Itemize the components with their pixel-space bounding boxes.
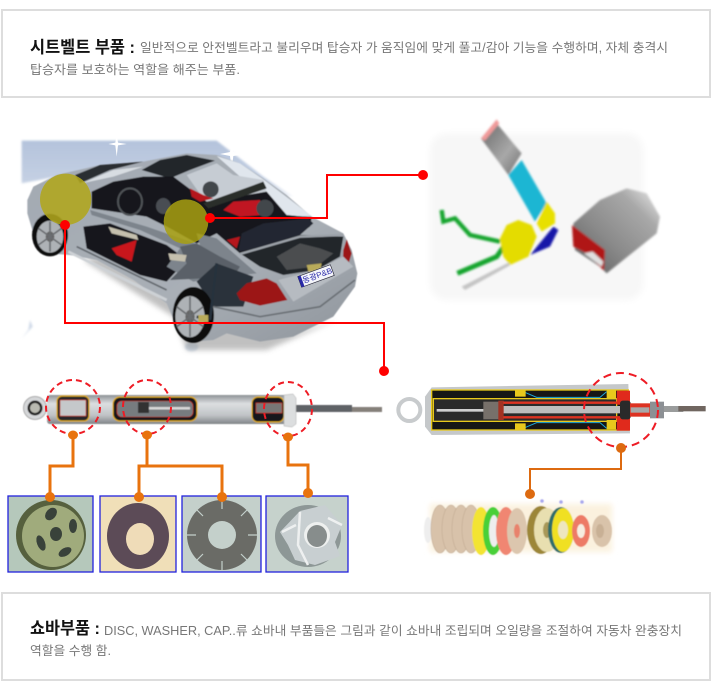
salmon ring	[572, 515, 590, 547]
orange connector right	[525, 443, 626, 499]
window 2	[113, 397, 197, 421]
red sleeve	[630, 403, 650, 417]
headrests	[203, 181, 219, 197]
highlight: rear seat belt area	[164, 199, 208, 244]
yellow seals	[515, 390, 526, 397]
hood dark detail	[75, 162, 143, 183]
text block: shock absorber description line 2: 역할을 수행 함.	[30, 643, 111, 658]
panel: shock absorber description	[2, 593, 710, 680]
rod end	[663, 406, 683, 412]
dashed red circles left	[46, 380, 312, 436]
grey strap tail	[462, 263, 510, 290]
blue base	[530, 227, 558, 255]
teal yellow disc	[548, 507, 574, 553]
roof opening	[142, 155, 215, 178]
small parts	[108, 227, 138, 240]
trunk lip	[240, 235, 343, 254]
heading: seat belt parts: 시트벨트 부품 :	[30, 38, 135, 57]
car body	[27, 153, 357, 342]
exploded valve parts	[424, 499, 612, 555]
inner rod	[437, 409, 485, 412]
strut	[197, 263, 217, 320]
rear tonneau	[238, 218, 313, 252]
yellow disc	[472, 507, 490, 555]
yellow buckle upper	[537, 202, 555, 232]
buckle cover	[573, 188, 660, 273]
trunk opening	[240, 235, 343, 275]
ground shadow	[83, 257, 337, 350]
photo: notched disc	[182, 496, 261, 572]
sky background	[22, 141, 293, 351]
rear suspension area	[197, 263, 253, 307]
rear wheel	[173, 287, 214, 343]
highlight: front seat belt area	[40, 174, 91, 225]
orange connectors left	[45, 430, 313, 502]
outer tube	[47, 395, 287, 424]
gold body	[527, 506, 555, 554]
cabin dark interior	[92, 177, 312, 253]
green disc	[483, 507, 503, 555]
lower door interior	[83, 223, 187, 282]
red valve lines	[503, 403, 620, 417]
outer casing	[425, 384, 630, 435]
tan disc	[507, 508, 527, 554]
heading: shock absorber parts: 쇼바부품 :	[30, 619, 100, 638]
piston	[483, 402, 503, 419]
steering wheel	[118, 188, 142, 215]
front wheel	[32, 214, 68, 256]
window 3	[252, 397, 284, 422]
dashed red circle right	[584, 373, 658, 447]
tan end disc	[592, 515, 612, 547]
text block: shock absorber description line 1: DISC, WASHER, CAP..류 쇼바내 부품들은 그림과 같이 쇼바내 조립되며 오일량을 조절하여 자동차 완충장치	[104, 624, 682, 638]
red cap blocks	[617, 391, 630, 405]
red seats	[190, 188, 213, 202]
sill highlight	[68, 252, 167, 300]
shock absorber left	[24, 394, 382, 427]
star flares	[108, 133, 127, 157]
inner black	[432, 390, 628, 430]
end cap	[284, 394, 296, 427]
tail light	[237, 278, 287, 306]
blue fluid lines	[523, 392, 607, 428]
translucent window band	[90, 210, 257, 282]
rear window light	[217, 156, 312, 217]
license plate: 동광P&B	[301, 265, 333, 285]
red connector: front highlight to shock absorber	[60, 220, 389, 376]
photo: metal cap	[266, 496, 348, 572]
yellow anchor	[500, 220, 537, 265]
piston rod	[292, 405, 352, 412]
soft background	[430, 133, 643, 300]
trunk lid	[278, 257, 353, 302]
green wires	[442, 210, 500, 242]
salmon disc	[496, 507, 516, 555]
bumper crease	[213, 280, 355, 317]
inner chamber	[433, 399, 617, 421]
red connector: rear highlight to belt illustration	[205, 170, 428, 223]
roll bar	[203, 182, 267, 208]
window 1	[57, 396, 89, 421]
soft glow background	[430, 504, 612, 552]
text block: seat belt description line 2: 탑승자를 보호하는 역할을 해주는 부품.	[30, 63, 240, 77]
car cutaway illustration	[22, 133, 357, 351]
photo: perforated disc	[8, 496, 93, 572]
violet drops	[540, 499, 544, 503]
cyan webbing	[508, 160, 547, 222]
photo: washer ring	[100, 496, 176, 572]
text block: seat belt description line 1: 일반적으로 안전벨트라고 불리우며 탑승자 가 움직임에 맞게 풀고/감아 기능을 수행하며, 자체 충격시	[140, 40, 668, 55]
eye ring	[398, 399, 420, 421]
belt strap	[481, 123, 522, 175]
seat belt parts illustration	[430, 119, 660, 300]
door glass grey	[170, 243, 240, 280]
panel: seat belt description	[2, 10, 710, 97]
eye mount	[24, 396, 46, 420]
shock absorber right	[398, 384, 706, 435]
